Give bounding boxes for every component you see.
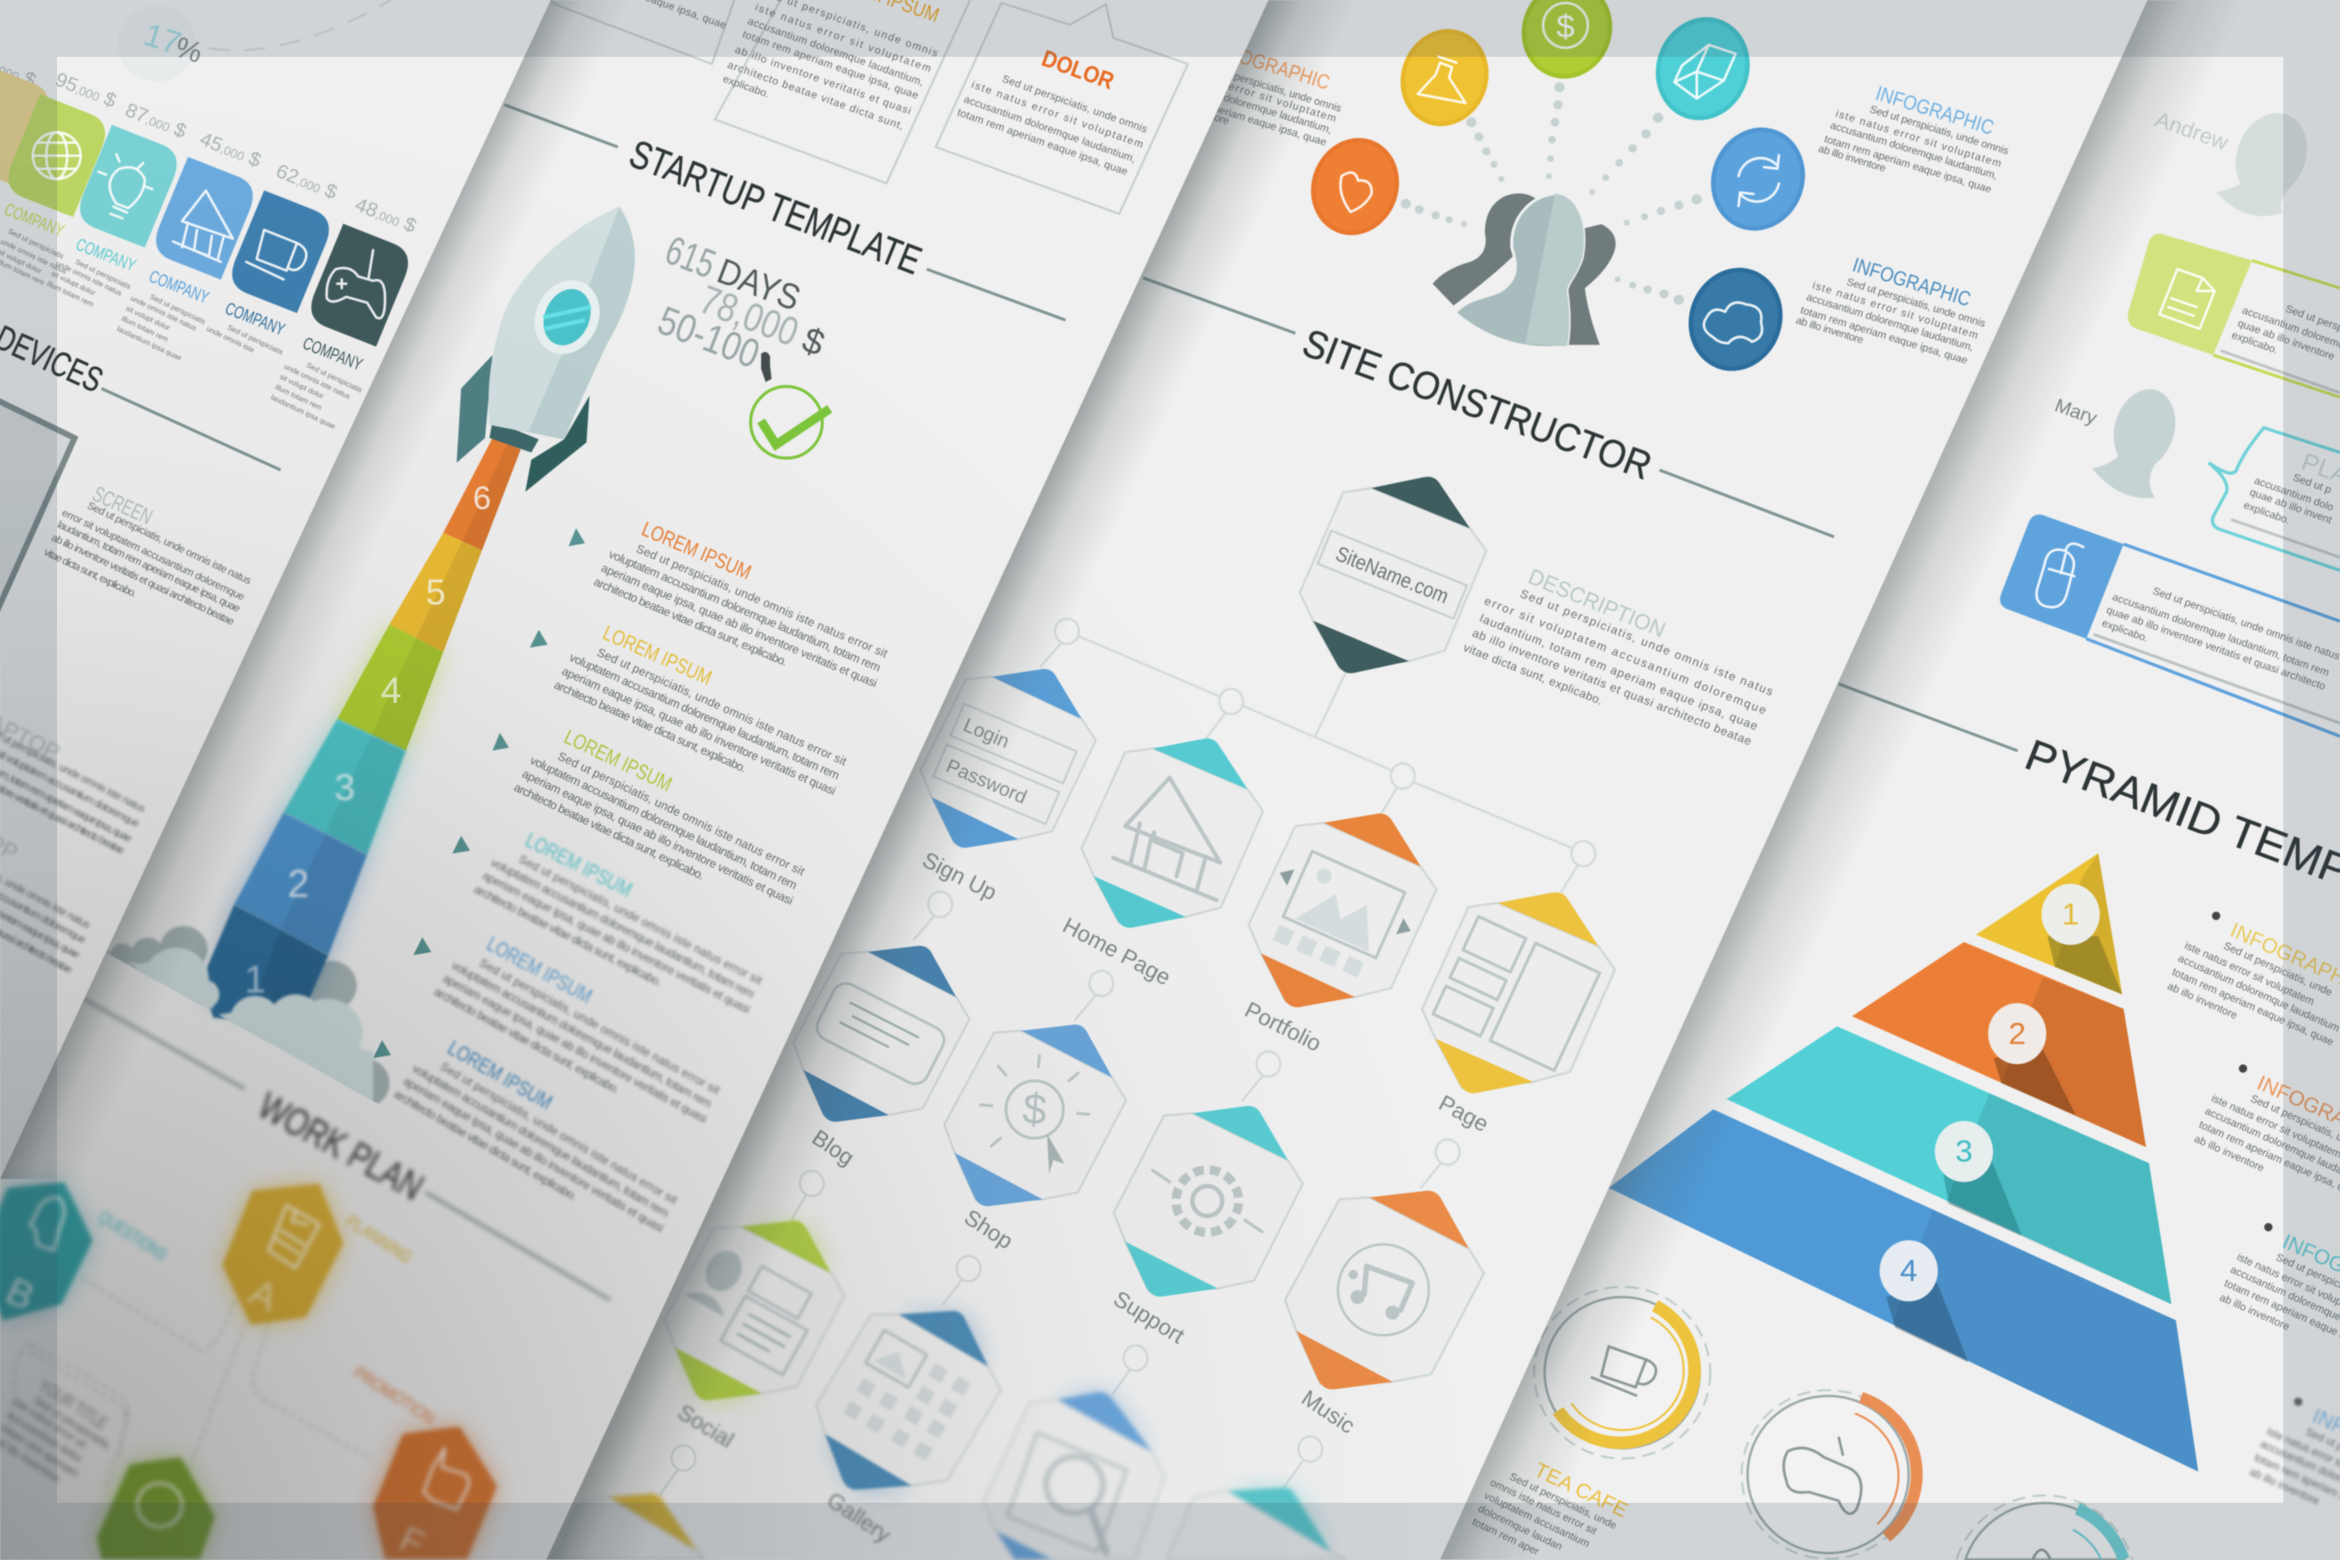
- paragraph: lorem ipsum teal: voluptatem accusantium doloremque laudantium, totam rem: [489, 855, 757, 1001]
- hexagon: B questions: B: [0, 1270, 41, 1319]
- paragraph: screen: ab illo inventore veritatis et quasi architecto beatae: [49, 532, 236, 628]
- list: infographic 1: totam rem aperiam eaque ipsa, quae: [2170, 966, 2335, 1048]
- company captions: illum totam rem: [274, 382, 323, 412]
- list: infographic 3: ab illo inventore: [2218, 1292, 2291, 1333]
- donut fragment: 17 percent: 17: [140, 16, 186, 61]
- shadow of startup page: [546, 0, 1418, 1560]
- hexagon: F promotion: [350, 1362, 497, 1560]
- hexagon: A planning: [222, 1184, 416, 1325]
- icon: dollar circle: $: [1556, 7, 1575, 44]
- pyramid level 4: 4: [1900, 1253, 1917, 1288]
- hexagon: portfolio: Portfolio: [1241, 997, 1325, 1057]
- heading: site constructor: [1143, 278, 1834, 537]
- pyramid level 3: [1727, 1026, 2171, 1304]
- paragraph: lorem ipsum dark blue: Sed ut perspiciatis, unde omnis iste natus error sit: [438, 1059, 681, 1207]
- company captions: sit volupt dolor: [278, 372, 326, 401]
- value labels: 62,000 $: [273, 161, 340, 204]
- company captions: Sed ut perspiciatis: [7, 227, 66, 261]
- paragraph: infographic blue: INFOGRAPHIC: [1873, 82, 1997, 140]
- box: lorem ipsum: architecto beatae vitae dicta sunt,: [726, 59, 905, 132]
- box: lorem ipsum: ab illo inventore veritatis et quasi: [733, 44, 913, 117]
- list: infographic 3: [2216, 1215, 2340, 1376]
- paragraph: description: ab illo inventore veritatis et quasi architecto beatae: [1470, 627, 1754, 748]
- box: dolor: [936, 3, 1188, 214]
- hexagon: search: [983, 1392, 1165, 1560]
- hexagon: music: [1278, 1179, 1491, 1439]
- launch glow: [209, 624, 443, 1015]
- paragraph: lorem ipsum dark blue: [392, 1025, 694, 1249]
- stats: days, budget, people: 615: [659, 228, 721, 287]
- company captions: laudantium ipsa quae: [269, 392, 337, 431]
- panel: startup page sheet: [0, 0, 1268, 1560]
- panel: pyramid template page: [1470, 103, 2340, 1560]
- hexagon: page: Page: [1435, 1090, 1493, 1137]
- company labels: COMPANY: [1, 199, 67, 241]
- company captions: unde omnis iste natus: [129, 294, 198, 333]
- company captions: laudantium ipsa quae: [116, 324, 183, 362]
- paragraph: infographic blue: Sed ut perspiciatis, unde omnis: [1868, 104, 2010, 157]
- paragraph: lorem ipsum yellow: Sed ut perspiciatis, unde omnis iste natus error sit: [595, 645, 849, 769]
- company labels: COMPANY: [146, 266, 212, 307]
- launch segment 2: [234, 812, 367, 955]
- donut fragment: 17 percent: %: [171, 31, 206, 70]
- list: infographic 1: accusantium doloremque laudantium: [2176, 952, 2340, 1035]
- paragraph: lorem ipsum blue: aperiam eaque ipsa, quae ab illo inventore veritatis et quasi: [440, 971, 709, 1126]
- company labels: [1, 199, 366, 374]
- panel: site constructor page content: [555, 0, 2010, 1560]
- clouds: dark back: [104, 926, 390, 1108]
- launch segment 4: 4: [381, 669, 401, 711]
- paragraph: lorem ipsum green: Sed ut perspiciatis, unde omnis iste natus error sit: [556, 749, 807, 879]
- launch segment 1: 1: [244, 958, 266, 1001]
- circle chart: tea cafe: doloremque laudan: [1476, 1503, 1564, 1553]
- hexagon: blog: Blog: [808, 1125, 859, 1171]
- company captions: illum totam rem: [120, 314, 170, 344]
- paragraph: lorem ipsum blue: voluptatem accusantium doloremque laudantium, totam rem: [449, 958, 714, 1111]
- company tile: cup: [225, 190, 336, 313]
- hexagon: F promotion: PROMOTION: [350, 1362, 439, 1428]
- shadow of site constructor page: [1440, 0, 2283, 1560]
- icon: heart circle: [1298, 125, 1413, 248]
- hexagon: teal lower: [1167, 1487, 1346, 1560]
- hexagon: support: Support: [1109, 1286, 1190, 1349]
- hexagon: blog: [787, 935, 976, 1171]
- card: teal bracket: [2209, 428, 2340, 570]
- panel: devices page content: [0, 0, 419, 976]
- card: blue mouse: explicabo.: [2100, 617, 2150, 645]
- icon: cube circle: [1641, 4, 1764, 134]
- paragraph: lorem ipsum green: architecto beatae vitae dicta sunt, explicabo.: [512, 780, 706, 883]
- company captions: unde omnis iste: [205, 324, 256, 354]
- box: lorem ipsum: [715, 0, 970, 183]
- value labels: 48,000 $: [352, 194, 419, 237]
- company tile: game: [304, 224, 415, 347]
- company captions: Sed ut perspiciatis: [148, 292, 207, 326]
- launch segment 4: [337, 624, 443, 751]
- text: your title: Sed ut perspiciatis,: [31, 1394, 114, 1452]
- company captions: illum totam rem: [45, 279, 95, 309]
- rocket fins: [457, 355, 589, 492]
- stats: days, budget, people: DAYS: [712, 251, 806, 319]
- value labels: [0, 48, 419, 237]
- paragraph: orange infographic: INFOGRAPHIC: [1209, 37, 1333, 94]
- circle chart: tea cafe: omnis iste natus error sit: [1488, 1477, 1599, 1537]
- paragraph: orange infographic: Sed ut perspiciatis, unde omnis: [1201, 61, 1343, 115]
- box: lorem ipsum: iste natus error sit voluptatem: [753, 2, 933, 75]
- company captions: Sed ut perspiciatis: [226, 323, 285, 357]
- paragraph: description: vitae dicta sunt, explicabo.: [1461, 641, 1605, 708]
- circle chart: tea cafe: Sed ut perspiciatis, unde: [1507, 1471, 1619, 1532]
- paragraph: screen: laudantium, totam rem aperiam eaque ipsa, quae: [55, 519, 242, 615]
- donut fragment: 17 percent: [118, 0, 391, 81]
- circle chart: tea cafe: [1470, 1287, 1710, 1558]
- card: green document: quae ab illo inventore: [2236, 318, 2336, 363]
- stats: days, budget, people: 78,000: [694, 277, 805, 355]
- paragraph: infographic dark blue: totam rem aperiam eaque ipsa, quae: [1799, 304, 1969, 367]
- paragraph: lorem ipsum orange: aperiam eaque ipsa, quae ab illo inventore veritatis et quasi: [599, 561, 879, 690]
- pyramid level 1: 1: [2062, 897, 2079, 931]
- box: dolor: totam rem aperiam eaque ipsa, quae: [956, 107, 1129, 178]
- paragraph: infographic dark blue: accusantium doloremque laudantium,: [1805, 291, 1975, 354]
- rocket nozzle: [489, 421, 539, 453]
- company captions: Sed ut perspiciatis: [74, 257, 133, 291]
- list: infographic 4: [2246, 1390, 2340, 1550]
- paragraph: infographic dark blue: Sed ut perspiciatis, unde omnis: [1845, 276, 1987, 330]
- hexagon: social: Social: [673, 1399, 738, 1453]
- panel: devices page sheet: [0, 0, 551, 1179]
- launch segment 2: 2: [288, 863, 309, 906]
- paragraph: description: Sed ut perspiciatis, unde omnis iste natus: [1518, 587, 1775, 699]
- company captions: unde omnis iste natus: [54, 259, 124, 298]
- text: your title: iste natus error sit: [10, 1396, 89, 1451]
- paragraph: lorem ipsum yellow: LOREM IPSUM: [599, 622, 715, 690]
- paragraph: lorem ipsum orange: LOREM IPSUM: [638, 518, 754, 584]
- heading: devices: [0, 319, 281, 470]
- value labels: 45,000 $: [197, 128, 264, 172]
- paragraph: description: [1461, 564, 1775, 748]
- paragraph: lorem ipsum green: [512, 715, 820, 922]
- card: teal bracket: accusantium dolo: [2252, 475, 2335, 514]
- company captions: Sed ut perspiciatis: [305, 360, 364, 395]
- card: blue mouse: [2000, 515, 2340, 736]
- company tile: globe: [1, 94, 112, 217]
- company labels: COMPANY: [300, 333, 366, 374]
- company tile: yellow: [0, 64, 56, 187]
- box: lorem ipsum: totam rem aperiam eaque ipsa, quae: [741, 28, 920, 102]
- clouds: light front: [127, 948, 373, 1104]
- icon: dollar circle: [1508, 0, 1626, 91]
- pyramid level 4: [1609, 1109, 2198, 1472]
- hexagon: B questions: QUESTIONS: [95, 1207, 171, 1264]
- box: lorem ipsum: accusantium doloremque laudantium,: [746, 15, 925, 89]
- list: infographic 1: ab illo inventore: [2165, 980, 2239, 1022]
- hexagon: sign up: [917, 663, 1099, 905]
- card: teal bracket: quae ab illo invent: [2248, 486, 2334, 526]
- paragraph: lorem ipsum orange: [592, 508, 901, 705]
- hexagon: B questions: [0, 1182, 171, 1320]
- list: infographic 4: ab illo inventore: [2247, 1466, 2321, 1508]
- launch segment 5: [390, 533, 482, 652]
- hexagon: A planning: PLANNING: [343, 1211, 416, 1267]
- text: your title: accusantium dolor: [4, 1409, 84, 1465]
- hexagon: shop: $: [1021, 1085, 1049, 1135]
- bullet triangles: [373, 528, 585, 1058]
- paragraph: infographic blue: totam rem aperiam eaque ipsa, quae: [1823, 133, 1993, 196]
- paragraph: infographic dark blue: [1794, 254, 1987, 367]
- hexagon: home page: [1059, 736, 1264, 990]
- paragraph: orange infographic: iste natus error sit voluptatem: [1169, 63, 1338, 125]
- icon: green check: [751, 387, 830, 458]
- pyramid level 2: 2: [2008, 1016, 2026, 1051]
- person: Mary: [2052, 382, 2184, 498]
- text: your title: [0, 1351, 126, 1489]
- paragraph: lorem ipsum teal: [472, 818, 778, 1031]
- paragraph: lorem ipsum teal: aperiam eaque ipsa, quae ab illo inventore veritatis et quasi: [480, 869, 752, 1017]
- paragraph: infographic dark blue: ab illo inventore: [1794, 315, 1865, 346]
- company captions: sit volupt dolor: [124, 304, 172, 332]
- list: infographic 1: Sed ut perspiciatis, unde: [2222, 940, 2334, 999]
- list: infographic 2: [2191, 1057, 2340, 1217]
- paragraph: lorem ipsum teal: architecto beatae vitae dicta sunt, explicabo.: [472, 882, 664, 989]
- hexagon: home page: Home Page: [1059, 913, 1175, 990]
- hexagon: support: [1108, 1097, 1308, 1349]
- paragraph: lorem ipsum blue: [432, 921, 736, 1140]
- diagram: dashed connectors: [7, 1278, 373, 1475]
- company captions: unde omnis iste natus: [283, 362, 352, 401]
- stats: days, budget, people: $: [797, 319, 830, 364]
- heading: work plan: WORK PLAN: [251, 1084, 431, 1209]
- box: dolor: iste natus error sit voluptatem: [970, 79, 1145, 151]
- pyramid level 3: 3: [1955, 1134, 1973, 1169]
- card: blue mouse: accusantium doloremque laudantium, totam rem: [2111, 591, 2331, 679]
- pyramid level 2: [1852, 942, 2146, 1147]
- launch segment 6: [443, 438, 521, 550]
- person: Mary: Mary: [2052, 395, 2100, 429]
- paragraph: infographic blue: [1817, 82, 2010, 196]
- icon: people group: [1433, 193, 1616, 348]
- paragraph: app: [0, 823, 92, 976]
- paragraph: lorem ipsum orange: Sed ut perspiciatis, unde omnis iste natus error sit: [634, 541, 890, 661]
- paragraph: screen: SCREEN: [89, 481, 156, 529]
- paragraph: lorem ipsum green: voluptatem accusantium doloremque laudantium, totam rem: [528, 753, 799, 892]
- list: infographic 1: [2164, 904, 2340, 1065]
- hexagon: music: Music: [1297, 1385, 1359, 1439]
- paragraph: orange infographic: ab illo inventore: [1160, 95, 1231, 127]
- card: green document: explicabo.: [2230, 329, 2280, 356]
- paragraph: infographic dark blue: INFOGRAPHIC: [1850, 254, 1974, 311]
- list: infographic 2: ab illo inventore: [2192, 1133, 2266, 1175]
- card: green document: [2128, 234, 2340, 397]
- company tile: house: [149, 157, 260, 280]
- chart: four level pyramid: [1609, 853, 2198, 1472]
- paragraph: lorem ipsum dark blue: voluptatem accusantium doloremque laudantium, totam rem: [410, 1061, 671, 1220]
- paragraph: screen: error sit voluptatem accusantium doloremque: [60, 507, 247, 603]
- paragraph: lorem ipsum orange: voluptatem accusantium doloremque laudantium, totam rem: [607, 547, 883, 675]
- paragraph: lorem ipsum dark blue: LOREM IPSUM: [444, 1037, 556, 1115]
- box: upper left text: [551, 0, 734, 64]
- hexagon: shop: Shop: [960, 1205, 1017, 1254]
- hexagon: site name: [1300, 477, 1486, 673]
- paragraph: lorem ipsum dark blue: aperiam eaque ipsa, quae ab illo inventore veritatis et quasi: [401, 1074, 666, 1235]
- rocket body: [488, 207, 635, 439]
- person: Andrew: [2152, 103, 2319, 216]
- company captions: [0, 227, 364, 431]
- hexagon: social: [658, 1210, 851, 1453]
- icon: flask circle: [1387, 17, 1502, 139]
- paragraph: lorem ipsum teal: Sed ut perspiciatis, unde omnis iste natus error sit: [516, 852, 765, 988]
- paragraph: lorem ipsum blue: architecto beatae vitae dicta sunt, explicabo.: [432, 984, 622, 1096]
- hexagon: site name: SiteName.com: [1332, 542, 1452, 608]
- paragraph: orange infographic: totam rem aperiam eaque ipsa, quae: [1158, 86, 1328, 149]
- paragraph: orange infographic: accusantium doloremque laudantium,: [1163, 74, 1333, 136]
- shadow of devices page: [0, 0, 670, 1179]
- text: your title: YOUR TITLE: [35, 1375, 111, 1433]
- hexagon: shop: [937, 1014, 1132, 1254]
- box: dolor: DOLOR: [1038, 45, 1118, 94]
- heading: site constructor: SITE CONSTRUCTOR: [1297, 321, 1657, 488]
- company tile: bulb: [73, 125, 184, 248]
- paragraph: lorem ipsum dark blue: architecto beatae vitae dicta sunt, explicabo.: [392, 1087, 580, 1203]
- launch segment 6: 6: [473, 479, 491, 516]
- person: Andrew: Andrew: [2152, 107, 2233, 155]
- hexagon: page: [1421, 890, 1616, 1137]
- hexagon: gallery: Gallery: [822, 1487, 896, 1548]
- hexagon: yellow lower: [555, 1494, 704, 1560]
- stats: days, budget, people: 50-100: [652, 298, 766, 377]
- hexagon: portfolio: [1241, 809, 1439, 1057]
- paragraph: orange infographic: [1158, 37, 1343, 149]
- circle chart: tea cafe: TEA CAFE: [1530, 1459, 1631, 1522]
- list: infographic 1: iste natus error sit voluptatem: [2183, 940, 2316, 1008]
- paragraph: lorem ipsum green: aperiam eaque ipsa, quae ab illo inventore veritatis et quasi: [520, 767, 795, 908]
- heading: pyramid template: [1839, 684, 2340, 935]
- paragraph: screen: Sed ut perspiciatis, unde omnis iste natus: [85, 500, 253, 587]
- rocket and launch column: [104, 207, 635, 1108]
- card: teal bracket: Sed ut p: [2291, 472, 2333, 496]
- paragraph: lorem ipsum teal: LOREM IPSUM: [522, 829, 636, 902]
- paragraph: lorem ipsum blue: Sed ut perspiciatis, unde omnis iste natus error sit: [477, 956, 723, 1098]
- paragraph: infographic blue: ab illo inventore: [1817, 143, 1887, 175]
- company labels: COMPANY: [222, 298, 288, 339]
- hexagon: sign up: Sign Up: [919, 847, 1001, 905]
- icon: cloud circle: [1674, 254, 1797, 384]
- launch segment 1: [201, 904, 328, 1024]
- paragraph: lorem ipsum yellow: [552, 612, 861, 812]
- value labels: 95,000 $: [52, 69, 119, 112]
- paragraph: lorem ipsum yellow: architecto beatae vitae dicta sunt, explicabo.: [552, 678, 749, 775]
- circle chart: teal ring: [1956, 1495, 2133, 1560]
- paragraph: description: DESCRIPTION: [1525, 564, 1669, 642]
- hexagon: sign up: Password: [943, 755, 1030, 809]
- hexagon: A planning: A: [242, 1271, 285, 1320]
- company captions: unde omnis iste natus: [0, 237, 69, 276]
- paragraph: lorem ipsum blue: LOREM IPSUM: [483, 933, 596, 1008]
- paragraph: infographic blue: accusantium doloremque laudantium,: [1829, 120, 1999, 182]
- box: dolor: accusantium doloremque laudantium,: [962, 94, 1137, 165]
- text: your title: totam rem aperiam: [0, 1422, 81, 1480]
- box: lorem ipsum: explicabo.: [721, 73, 771, 100]
- circle chart: tea cafe: totam rem aper: [1470, 1516, 1541, 1558]
- hexagon: sign up: Login: [960, 714, 1012, 753]
- paragraph: lorem ipsum yellow: voluptatem accusantium doloremque laudantium, totam rem: [567, 650, 842, 783]
- device screen: [0, 372, 75, 611]
- paragraph: description: error sit voluptatem accusantium doloremque: [1482, 595, 1768, 717]
- heading: work plan: [84, 999, 610, 1300]
- panel: startup page content: [0, 0, 1188, 1560]
- paragraph: infographic blue: iste natus error sit voluptatem: [1834, 108, 2003, 170]
- company labels: COMPANY: [73, 234, 139, 275]
- icon: refresh circle: [1697, 114, 1819, 244]
- launch segment 3: 3: [334, 766, 355, 808]
- company captions: sit volupt dolor: [50, 269, 98, 298]
- paragraph: screen: [42, 481, 253, 628]
- box: dolor: Sed ut perspiciatis, unde omnis: [1000, 73, 1149, 136]
- circle chart: game: [1742, 1390, 1917, 1559]
- paragraph: screen: vitae dicta sunt, explicabo.: [42, 546, 139, 600]
- launch segment 3: [284, 719, 406, 855]
- heading: startup template: [504, 105, 1066, 320]
- list: infographic 2: iste natus error sit voluptatem: [2209, 1092, 2340, 1161]
- paragraph: lorem ipsum yellow: aperiam eaque ipsa, quae ab illo inventore veritatis et quasi: [560, 664, 838, 798]
- diagram: site tree connectors: [660, 619, 1595, 1495]
- card: blue mouse: quae ab illo inventore veritatis et quasi architecto: [2105, 604, 2327, 693]
- launch segment 5: 5: [426, 572, 446, 612]
- pyramid level 1: [1976, 853, 2122, 994]
- card: teal bracket: explicabo.: [2242, 499, 2292, 527]
- heading: startup template: STARTUP TEMPLATE: [623, 132, 927, 283]
- stats: days, budget, people: [652, 228, 830, 382]
- circle chart: tea cafe: voluptatem accusantium: [1482, 1490, 1592, 1550]
- paragraph: lorem ipsum orange: architecto beatae vitae dicta sunt, explicabo.: [592, 575, 789, 669]
- hexagon: gallery: [805, 1294, 1011, 1548]
- paragraph: description: laudantium, totam rem aperiam eaque ipsa, quae: [1478, 612, 1760, 733]
- section: work plan: [0, 999, 610, 1560]
- diagram: dotted connectors: [1401, 82, 1702, 305]
- paragraph: lorem ipsum green: LOREM IPSUM: [560, 725, 675, 796]
- hexagon: green chart: [97, 1457, 215, 1559]
- card: blue mouse: Sed ut perspiciatis, unde omnis iste natus: [2151, 585, 2340, 663]
- paragraph: infographic dark blue: iste natus error sit voluptatem: [1811, 280, 1980, 342]
- value labels: 87,000 $: [122, 99, 190, 143]
- paragraph: laptop: [0, 704, 147, 857]
